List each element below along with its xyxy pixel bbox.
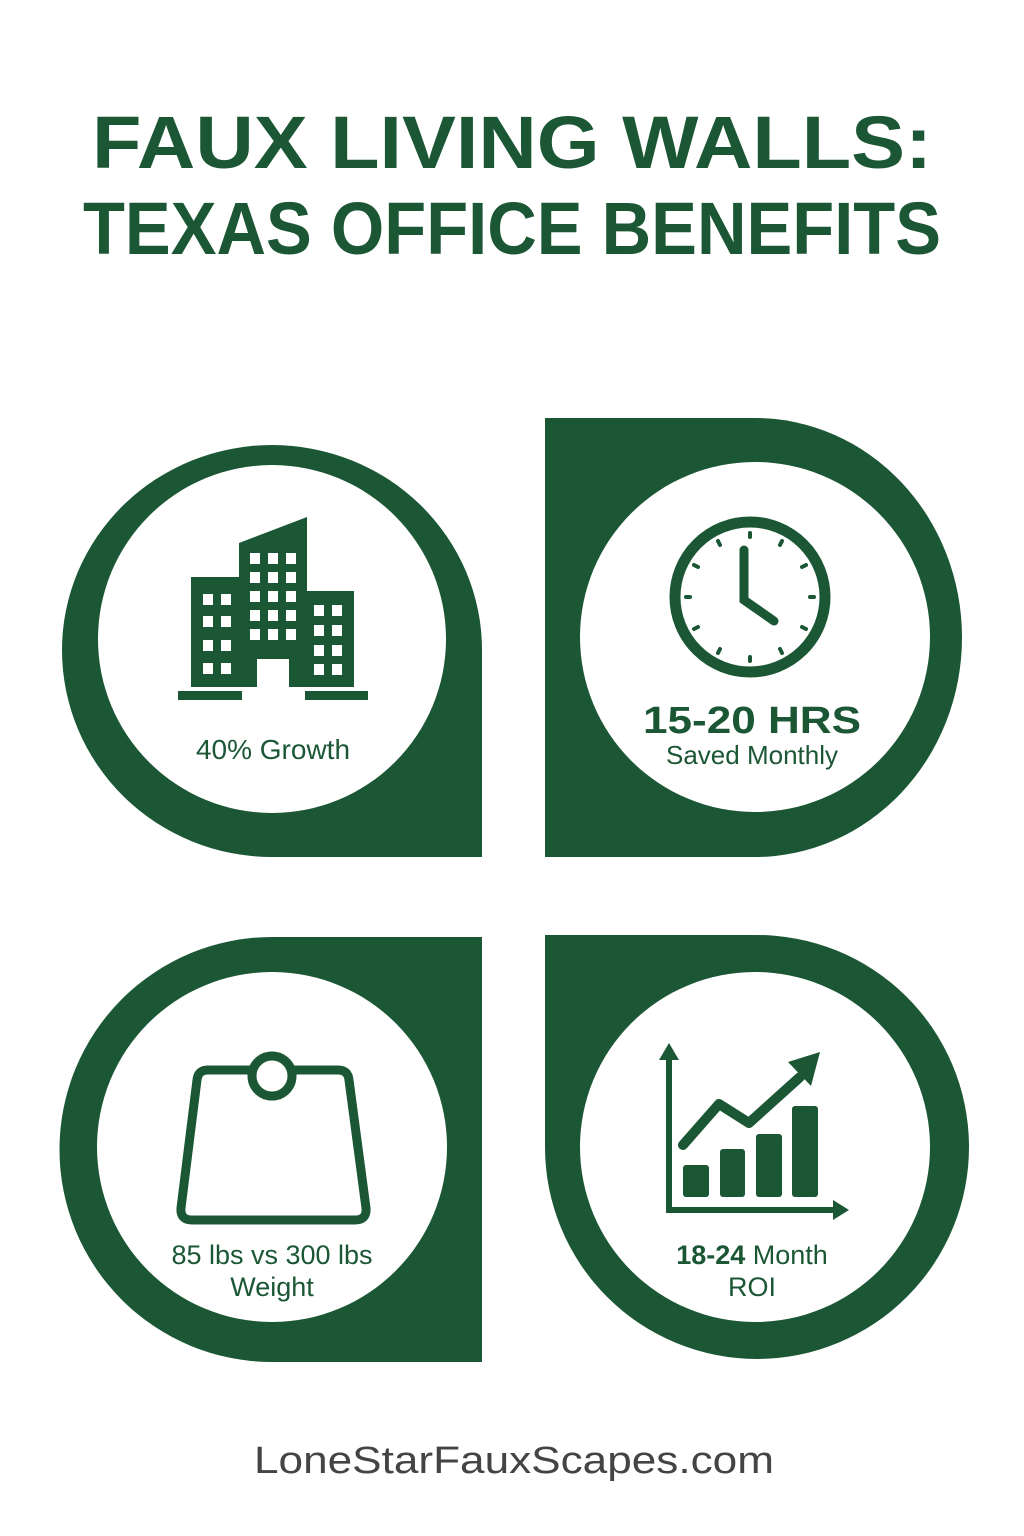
icon: clock (675, 522, 825, 672)
title: TEXAS OFFICE BENEFITS (83, 187, 941, 270)
text: ROI: 18-24 Month (676, 1240, 828, 1270)
panel: growth (62, 445, 482, 857)
text: 15-20 HRS: 15-20 HRS (643, 700, 861, 742)
panel: time saved (545, 418, 962, 857)
title: FAUX LIVING WALLS: (92, 101, 932, 184)
icon: growth chart (659, 1043, 849, 1220)
text: saved monthly: Saved Monthly (666, 740, 838, 770)
footer: website: LoneStarFauxScapes.com (254, 1440, 774, 1482)
icon: buildings (178, 517, 368, 700)
panel: weight: Weight (230, 1272, 314, 1302)
panel: weight (60, 937, 482, 1362)
panel: ROI: ROI (728, 1272, 776, 1302)
title (83, 101, 941, 270)
text: 40% growth: 40% Growth (196, 734, 350, 765)
icon: weight scale (181, 1056, 366, 1220)
text: weight: 85 lbs vs 300 lbs (171, 1240, 373, 1270)
panel: ROI (545, 935, 969, 1359)
